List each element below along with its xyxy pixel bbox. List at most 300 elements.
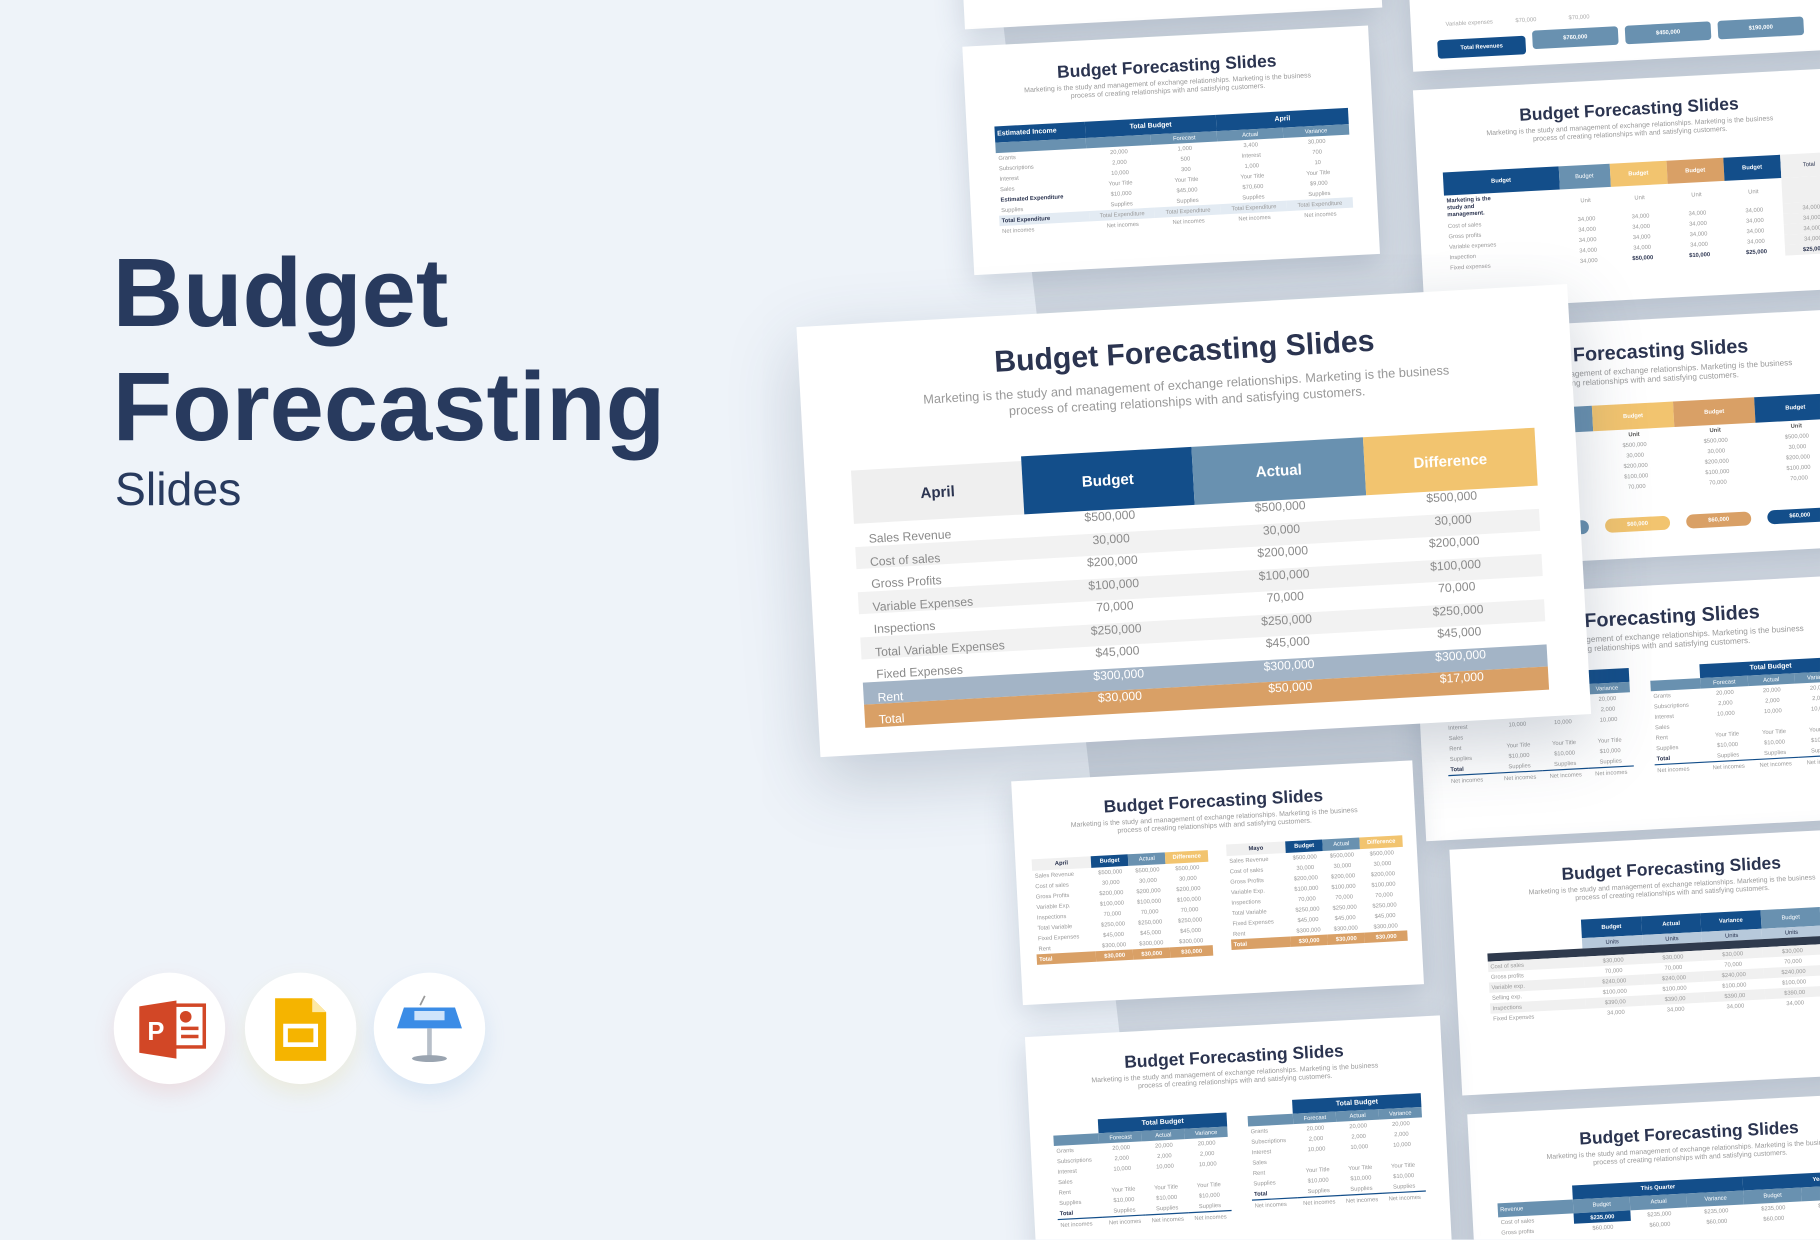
- slide D: total budget tables: Your Title: [1762, 728, 1786, 736]
- slide C: unit columns with pills: Marketing is the study and management of exchange relationships. Marketing is the business: [1457, 359, 1792, 385]
- slide E: April and Mayo tables: Mayo: [1248, 845, 1264, 853]
- slide D tables: Your Title: [1597, 736, 1622, 745]
- slide A table: 20,000: [1110, 148, 1128, 156]
- main table rows: $250,000: [1261, 612, 1312, 628]
- slide D: total budget tables: Interest: [1654, 713, 1674, 721]
- slide D tables: Interest: [1448, 723, 1468, 731]
- slide D tables: $10,000: [1554, 749, 1575, 757]
- slide A table: Supplies: [1242, 193, 1265, 201]
- slide H table: $60,000: [1763, 1215, 1784, 1223]
- slide E tables: $30,000: [1181, 947, 1202, 956]
- slide H table: $235,000: [1761, 1204, 1786, 1212]
- slide E: April and Mayo tables: $250,000: [1295, 905, 1320, 914]
- slide E tables: $100,000: [1177, 895, 1201, 903]
- slide E: April and Mayo tables: $30,000: [1298, 937, 1320, 945]
- slide F table: 70,000: [1784, 957, 1802, 965]
- slide D: total budget tables: Sales: [1655, 723, 1670, 731]
- slide F table: $30,000: [1722, 950, 1743, 958]
- slide D: total budget tables: $10,000: [1764, 738, 1785, 746]
- slide C table: Budget: [1704, 408, 1724, 416]
- slide E tables: $45,000: [1180, 927, 1201, 935]
- slide C: unit columns with pills: process of creating relationships with and satisfying customers.: [1512, 371, 1739, 391]
- slide G: two total budget tables: 10,000: [1393, 1141, 1411, 1149]
- slide F: units table: [1449, 827, 1820, 1095]
- slide C: unit columns with pills: $60,000: [1789, 512, 1811, 520]
- slide H table: $60,000: [1706, 1218, 1727, 1226]
- slide D: total budget tables: 2,000: [1718, 699, 1733, 707]
- slide E tables: 30,000: [1139, 877, 1157, 884]
- slide B table: Budget: [1685, 167, 1705, 175]
- slide E: April and Mayo tables: process of creating relationships with and satisfying customers.: [1117, 818, 1312, 835]
- slide B table: $25,000: [1746, 248, 1767, 256]
- slide A table: $9,000: [1310, 179, 1328, 187]
- slide G tables: Sales: [1058, 1178, 1073, 1186]
- slide G tables: Your Title: [1111, 1185, 1136, 1194]
- slide E tables: $300,000: [1102, 941, 1126, 949]
- slide F table: $100,000: [1782, 978, 1806, 986]
- slide B heading: Budget Forecasting Slides: [1519, 94, 1739, 125]
- slide E tables: $200,000: [1136, 887, 1161, 895]
- title: Budget Forecasting: [113, 238, 665, 515]
- slide G tables: 2,000: [1157, 1152, 1172, 1160]
- slide B table: 34,000: [1746, 217, 1764, 225]
- slide G: two total budget tables: Net incomes: [1346, 1196, 1378, 1204]
- slide A table: Total Budget: [1129, 122, 1172, 131]
- slide B table: 34,000: [1578, 215, 1596, 223]
- slide G tables: Your Title: [1154, 1183, 1178, 1191]
- icon: Keynote: [374, 973, 485, 1084]
- main slide heading: Budget Forecasting Slides: [993, 323, 1375, 379]
- slide: top-right partial with totals: $450,000: [1656, 29, 1680, 37]
- slide F table: Selling exp.: [1492, 993, 1522, 1002]
- slide F table: $390,00: [1784, 989, 1805, 997]
- slide B table: Gross profits: [1448, 231, 1482, 240]
- slide G tables: Total Budget: [1142, 1118, 1184, 1127]
- slide E tables: 30,000: [1179, 875, 1197, 882]
- main table rows: $200,000: [1087, 553, 1138, 570]
- slide E: April and Mayo tables: $500,000: [1370, 849, 1394, 857]
- main table rows: $250,000: [1090, 621, 1142, 638]
- slide E: April and Mayo tables: $300,000: [1296, 926, 1321, 934]
- slide C table: 70,000: [1465, 491, 1484, 499]
- slide G: two total budget tables: 20,000: [1392, 1120, 1410, 1128]
- slide B table: 34,000: [1579, 246, 1597, 254]
- slide: top-right partial with totals: Total Revenues: [1460, 43, 1503, 52]
- slide D tables: Supplies: [1508, 762, 1531, 770]
- slide D: total budget tables: Grants: [1653, 692, 1671, 700]
- slide G: two total budget tables: $10,000: [1350, 1174, 1372, 1182]
- slide A heading: Budget Forecasting Slides: [1057, 51, 1277, 82]
- slide D: total budget tables: Net incomes: [1712, 762, 1745, 771]
- main table rows: Total Variable Expenses: [875, 638, 1005, 659]
- slide F table: $390,00: [1664, 995, 1686, 1003]
- slide G: two total budget tables: 10,000: [1307, 1145, 1326, 1153]
- slide G tables: Variance: [1195, 1129, 1217, 1137]
- slide E: April and Mayo tables: 30,000: [1333, 862, 1351, 870]
- slide B table: Unit: [1691, 191, 1702, 199]
- main table rows: $30,000: [1098, 689, 1142, 706]
- slide F table: $240,000: [1721, 971, 1746, 979]
- slide C table: $100,000: [1543, 476, 1567, 484]
- slide E tables: $250,000: [1101, 920, 1125, 928]
- title: Budget Forecasting: Budget: [113, 238, 448, 347]
- slide B table: Variable expenses: [1449, 241, 1496, 251]
- slide E: April and Mayo tables: Difference: [1367, 838, 1396, 846]
- slide B table: Budget: [1742, 164, 1762, 172]
- slide B table: management.: [1447, 210, 1485, 219]
- slide A table: [994, 108, 1353, 235]
- slide G tables: 2,000: [1114, 1154, 1129, 1162]
- slide G tables: Supplies: [1113, 1206, 1136, 1214]
- slide D tables: Net incomes: [1504, 773, 1536, 782]
- slide E: April and Mayo tables: $100,000: [1294, 884, 1319, 893]
- slide H heading: Budget Forecasting Slides: [1579, 1118, 1799, 1149]
- slide E: April and Mayo tables: 70,000: [1298, 895, 1316, 903]
- slide C: unit columns with pills: [1402, 309, 1820, 570]
- slide G: two total budget tables: Total: [1254, 1190, 1268, 1198]
- slide E: April and Mayo tables: Gross Profits: [1230, 877, 1264, 886]
- slide G: two total budget tables: Forecast: [1303, 1114, 1326, 1122]
- slide E: April and Mayo tables: $200,000: [1371, 870, 1395, 878]
- slide B: colored budget columns: Marketing is the study and management of exchange relationships. Marketing is the business: [1486, 116, 1773, 138]
- slide F table: $30,000: [1662, 953, 1684, 961]
- slide D tables: $10,000: [1508, 752, 1530, 760]
- slide E: April and Mayo tables: $300,000: [1373, 922, 1398, 930]
- slide E: April and Mayo tables: 70,000: [1335, 893, 1353, 901]
- title: Budget Forecasting: Slides: [115, 464, 241, 515]
- slide B table: Unit: [1748, 188, 1759, 196]
- slide B table: study and: [1447, 203, 1475, 212]
- slide F table: 70,000: [1664, 964, 1682, 972]
- slide: top-right partial with totals: [1401, 0, 1820, 72]
- slide A table: 1,000: [1177, 145, 1192, 152]
- slide E tables: 70,000: [1141, 908, 1159, 916]
- slide B: colored budget columns: [1413, 68, 1820, 311]
- slide G: two total budget tables: 20,000: [1306, 1124, 1324, 1132]
- slide: top-right partial with totals: Variable expenses $70,000 $70,000: [1445, 14, 1590, 28]
- main table rows: 30,000: [1434, 512, 1472, 528]
- slide A table: $45,000: [1176, 186, 1198, 194]
- slide D tables: Your Title: [1506, 741, 1531, 749]
- slide F table: Units: [1725, 932, 1738, 939]
- slide D: total budget tables: Total: [1657, 755, 1670, 762]
- slide G tables: Supplies: [1156, 1204, 1178, 1212]
- slide F table: Cost of sales: [1490, 961, 1524, 970]
- main table rows: 70,000: [1266, 589, 1304, 605]
- slide H: quarter table: process of creating relationships with and satisfying customers.: [1593, 1150, 1788, 1167]
- slide D: total budget tables: 20,000: [1716, 689, 1734, 696]
- slide E tables: Cost of sales: [1035, 881, 1069, 890]
- slide A table: Total Expenditure: [1001, 215, 1050, 224]
- main table rows: $100,000: [1430, 557, 1481, 574]
- slide A table: Total Expenditure: [1297, 199, 1342, 209]
- slide G tables: 10,000: [1156, 1162, 1174, 1170]
- slide F table: Budget: [1781, 914, 1800, 922]
- slide A table: Supplies: [1176, 197, 1199, 205]
- slide F table: 70,000: [1605, 967, 1623, 975]
- slide B table: 34,000: [1802, 203, 1820, 211]
- slide E tables: Gross Profits: [1036, 892, 1070, 900]
- slide E tables: $30,000: [1141, 950, 1162, 958]
- slide D: total budget tables: Supplies: [1717, 751, 1739, 759]
- slide H table: Budget: [1763, 1192, 1782, 1200]
- slide C table: $500,000: [1785, 432, 1809, 440]
- slide A: estimated income table: Marketing is the study and management of exchange relationships. Marketing is the business: [1024, 73, 1311, 95]
- main table rows: $500,000: [1426, 489, 1477, 506]
- main table header: April: [920, 482, 955, 502]
- slide C table: $200,000: [1786, 453, 1810, 461]
- slide A table: Your Title: [1174, 176, 1199, 184]
- slide G tables: 10,000: [1199, 1160, 1217, 1168]
- slide G: two total budget tables: $10,000: [1393, 1172, 1414, 1180]
- title: Budget Forecasting: Forecasting: [113, 352, 665, 461]
- slide B table: $50,000: [1632, 254, 1653, 262]
- slide C table: Unit: [1548, 435, 1558, 442]
- slide E tables: $300,000: [1179, 937, 1203, 945]
- slide E tables: $100,000: [1137, 897, 1161, 906]
- slide A table: Your Title: [1306, 169, 1330, 177]
- main table rows: $200,000: [1428, 534, 1480, 551]
- icon: PowerPoint: [114, 973, 225, 1084]
- slide A table: Total Expenditure: [1100, 210, 1145, 219]
- slide H table: $60,000: [1649, 1221, 1671, 1229]
- slide G: two total budget tables: 2,000: [1394, 1130, 1409, 1138]
- main table rows: $45,000: [1265, 634, 1310, 651]
- slide B table: 34,000: [1632, 223, 1650, 230]
- slide G tables: Net incomes: [1109, 1218, 1141, 1226]
- main table rows: Total: [878, 712, 905, 727]
- slide A table: Estimated Expenditure: [1000, 193, 1064, 203]
- slide F: units table: process of creating relationships with and satisfying customers.: [1575, 885, 1770, 902]
- main table rows: 30,000: [1092, 531, 1130, 547]
- main table header: [851, 428, 1538, 524]
- slide H table: $235,000: [1647, 1210, 1672, 1218]
- slide B table: 34,000: [1580, 257, 1598, 265]
- main table rows: $100,000: [1258, 566, 1310, 583]
- slide E tables: $500,000: [1135, 866, 1160, 874]
- slide A table: Your Title: [1240, 172, 1265, 180]
- main table rows: [856, 489, 1550, 728]
- slide A table: Supplies: [1308, 190, 1331, 198]
- slide E: April and Mayo tables: $300,000: [1333, 924, 1358, 932]
- slide F table: Inspections: [1492, 1003, 1522, 1012]
- slide G: two total budget tables: $10,000: [1308, 1176, 1329, 1184]
- slide E: April and Mayo tables: Variable Exp.: [1231, 887, 1265, 896]
- slide G tables: Net incomes: [1060, 1220, 1093, 1229]
- slide A table: Forecast: [1173, 134, 1196, 142]
- slide E tables: $45,000: [1103, 931, 1124, 939]
- slide G: two total budget tables: Your Title: [1348, 1164, 1372, 1172]
- slide C table: 30,000: [1464, 460, 1482, 468]
- slide A table: Net incomes: [1304, 210, 1337, 219]
- main table header: Actual: [1255, 461, 1302, 480]
- slide A: estimated income table: process of creating relationships with and satisfying customers.: [1071, 83, 1265, 100]
- slide E: April and Mayo tables: Sales Revenue: [1229, 856, 1269, 865]
- slide C: unit columns with pills: $60,000: [1627, 520, 1648, 528]
- slide G: two total budget tables: Sales: [1252, 1159, 1267, 1166]
- slide A table: Interest: [999, 175, 1019, 183]
- slide E tables: [1032, 850, 1214, 965]
- slide E tables: Difference: [1172, 853, 1201, 861]
- slide B: colored budget columns: process of creating relationships with and satisfying customers.: [1533, 126, 1728, 143]
- slide G tables: Total: [1060, 1210, 1073, 1217]
- slide F table: Actual: [1662, 920, 1680, 928]
- main table rows: $17,000: [1439, 670, 1484, 686]
- slide G: two total budget tables: Interest: [1252, 1148, 1271, 1156]
- slide D: total budget tables: Your Title: [1715, 730, 1739, 738]
- slide E: April and Mayo tables: Marketing is the study and management of exchange relationships. Marketing is the business: [1071, 807, 1358, 829]
- slide G tables: Forecast: [1109, 1133, 1132, 1141]
- slide D: total budget tables: 2,000: [1765, 697, 1780, 704]
- slide E tables: $100,000: [1100, 899, 1124, 907]
- slide A table: Total Expenditure: [1166, 206, 1211, 216]
- slide F table: 34,000: [1786, 999, 1804, 1007]
- slide G tables: $10,000: [1199, 1191, 1220, 1199]
- slide D: total budget tables: Supplies: [1656, 744, 1679, 752]
- slide G tables: Rent: [1058, 1189, 1071, 1196]
- slide H table: Revenue: [1500, 1206, 1524, 1214]
- slide A table: Your Title: [1108, 179, 1133, 187]
- slide C table: $500,000: [1622, 441, 1647, 449]
- slide C table: Budget: [1785, 404, 1806, 412]
- slide H table: Budget: [1592, 1201, 1611, 1209]
- slide B table: 34,000: [1632, 212, 1650, 220]
- slide E tables: 70,000: [1180, 906, 1199, 914]
- slide D tables: 10,000: [1554, 718, 1572, 726]
- slide E tables: April: [1055, 860, 1068, 867]
- slide D tables: Net incomes: [1549, 771, 1582, 780]
- slide E tables: $45,000: [1140, 929, 1161, 937]
- slide B table: Total: [1803, 161, 1815, 169]
- slide E tables: $200,000: [1176, 885, 1201, 893]
- slide C table: $200,000: [1705, 457, 1729, 466]
- slide E tables: $300,000: [1139, 939, 1164, 947]
- slide C table: $200,000: [1542, 466, 1567, 474]
- slide F table: 70,000: [1724, 961, 1742, 968]
- slide D: total budget tables: [1413, 575, 1820, 841]
- slide C table: Budget: [1543, 417, 1561, 425]
- slide D tables: Your Title: [1552, 739, 1576, 747]
- slide E: April and Mayo tables: $30,000: [1336, 935, 1357, 943]
- slide D tables: Subscriptions: [1447, 712, 1483, 721]
- slide F table: $390,00: [1605, 998, 1626, 1006]
- slide G tables: 20,000: [1198, 1139, 1216, 1147]
- slide E tables: $30,000: [1104, 952, 1125, 960]
- slide E tables: $250,000: [1178, 916, 1202, 924]
- slide C table: 70,000: [1628, 483, 1646, 490]
- slide C table: 30,000: [1707, 447, 1725, 455]
- slide E tables: Inspections: [1037, 913, 1066, 921]
- slide G: two total budget tables: Total Budget: [1336, 1099, 1378, 1108]
- slide G tables: Net incomes: [1151, 1215, 1184, 1224]
- slide D tables: 10,000: [1599, 716, 1618, 724]
- slide: top-left partial: [953, 0, 1382, 29]
- slide A table: Supplies: [1110, 200, 1133, 208]
- slide B table: Budget: [1491, 177, 1511, 185]
- slide D tables: $10,000: [1600, 747, 1621, 755]
- main table rows: $300,000: [1263, 657, 1315, 674]
- slide E: April and Mayo tables: $250,000: [1332, 903, 1357, 912]
- slide B table: Fixed expenses: [1450, 262, 1491, 271]
- slide D tables: Variance: [1595, 684, 1618, 692]
- slide A table: 700: [1312, 148, 1322, 156]
- slide D tables: Actual: [1553, 687, 1570, 695]
- main table rows: $250,000: [1432, 602, 1484, 619]
- main slide: April budget table: [796, 284, 1591, 757]
- slide B table: [1442, 152, 1820, 271]
- slide G tables: [1053, 1112, 1232, 1229]
- slide E: April and Mayo tables: $500,000: [1292, 853, 1317, 861]
- slide G tables: $10,000: [1156, 1194, 1177, 1202]
- slide H table: Actual: [1650, 1198, 1667, 1206]
- slide G: two total budget tables: Variance: [1389, 1109, 1412, 1117]
- slide C table: $500,000: [1460, 449, 1485, 457]
- slide E tables: Actual: [1139, 855, 1155, 863]
- slide G: two total budget tables: Net incomes: [1303, 1198, 1336, 1207]
- slide D: total budget tables: Forecast: [1713, 678, 1736, 686]
- main slide subtitle: Marketing is the study and management of exchange relationships. Marketing is the business: [923, 364, 1450, 407]
- main table rows: $200,000: [1257, 544, 1309, 561]
- slide F table: 34,000: [1667, 1005, 1685, 1013]
- slide G tables: 20,000: [1112, 1144, 1130, 1152]
- slide C: unit columns with pills: $60,000: [1708, 516, 1729, 524]
- slide A table: Net incomes: [1002, 226, 1035, 235]
- main table rows: Fixed Expenses: [876, 663, 963, 682]
- slide D tables: Grants: [1447, 703, 1465, 711]
- slide C: unit columns with pills: $60,000: [1546, 525, 1567, 533]
- slide G tables: Net incomes: [1194, 1213, 1227, 1222]
- slide D tables: Total Budget: [1540, 674, 1582, 683]
- slide B table: Budget: [1628, 170, 1649, 178]
- slide G heading: Budget Forecasting Slides: [1124, 1041, 1344, 1073]
- slide A table: Variance: [1305, 127, 1327, 135]
- slide E tables: 30,000: [1102, 879, 1120, 886]
- slide D: total budget tables: Net incomes: [1657, 765, 1690, 774]
- slide G tables: Subscriptions: [1057, 1156, 1092, 1165]
- slide B table: 34,000: [1689, 230, 1708, 238]
- main table rows: 30,000: [1262, 522, 1300, 538]
- slide E: April and Mayo tables: 70,000: [1375, 891, 1393, 899]
- slide G: two total budget tables: Supplies: [1253, 1179, 1276, 1187]
- slide B table: 34,000: [1578, 225, 1596, 233]
- main table rows: $45,000: [1095, 644, 1140, 660]
- slide A table: Net incomes: [1106, 221, 1139, 229]
- slide A table: Total Expenditure: [1231, 203, 1277, 212]
- slide A table: Sales: [1000, 185, 1015, 193]
- slide A table: Interest: [1241, 151, 1261, 159]
- slide C table: [1460, 394, 1820, 499]
- slide G tables: 10,000: [1113, 1165, 1131, 1173]
- slide A table: Grants: [998, 154, 1016, 162]
- slide F table: Fixed Expenses: [1493, 1013, 1535, 1022]
- slide G: two total budget tables: 10,000: [1350, 1143, 1368, 1151]
- icon: Google Slides: [245, 973, 356, 1084]
- slide G tables: Grants: [1056, 1147, 1074, 1155]
- slide B table: Marketing is the: [1446, 196, 1491, 205]
- slide E tables: $200,000: [1099, 889, 1124, 897]
- slide A table: $10,000: [1110, 190, 1132, 198]
- slide G: two total budget tables: Rent: [1253, 1169, 1265, 1177]
- slide E tables: Fixed Expenses: [1038, 933, 1079, 942]
- slide A table: 2,000: [1112, 158, 1127, 166]
- slide G: two total budget tables: Subscriptions: [1251, 1137, 1286, 1146]
- slide D tables: Supplies: [1554, 760, 1576, 768]
- slide E heading: Budget Forecasting Slides: [1103, 786, 1323, 817]
- main table rows: Sales Revenue: [868, 528, 952, 546]
- slide C table: Unit: [1790, 422, 1802, 430]
- slide B table: Unit: [1580, 197, 1591, 205]
- slide D: total budget tables: Subscriptions: [1654, 701, 1689, 710]
